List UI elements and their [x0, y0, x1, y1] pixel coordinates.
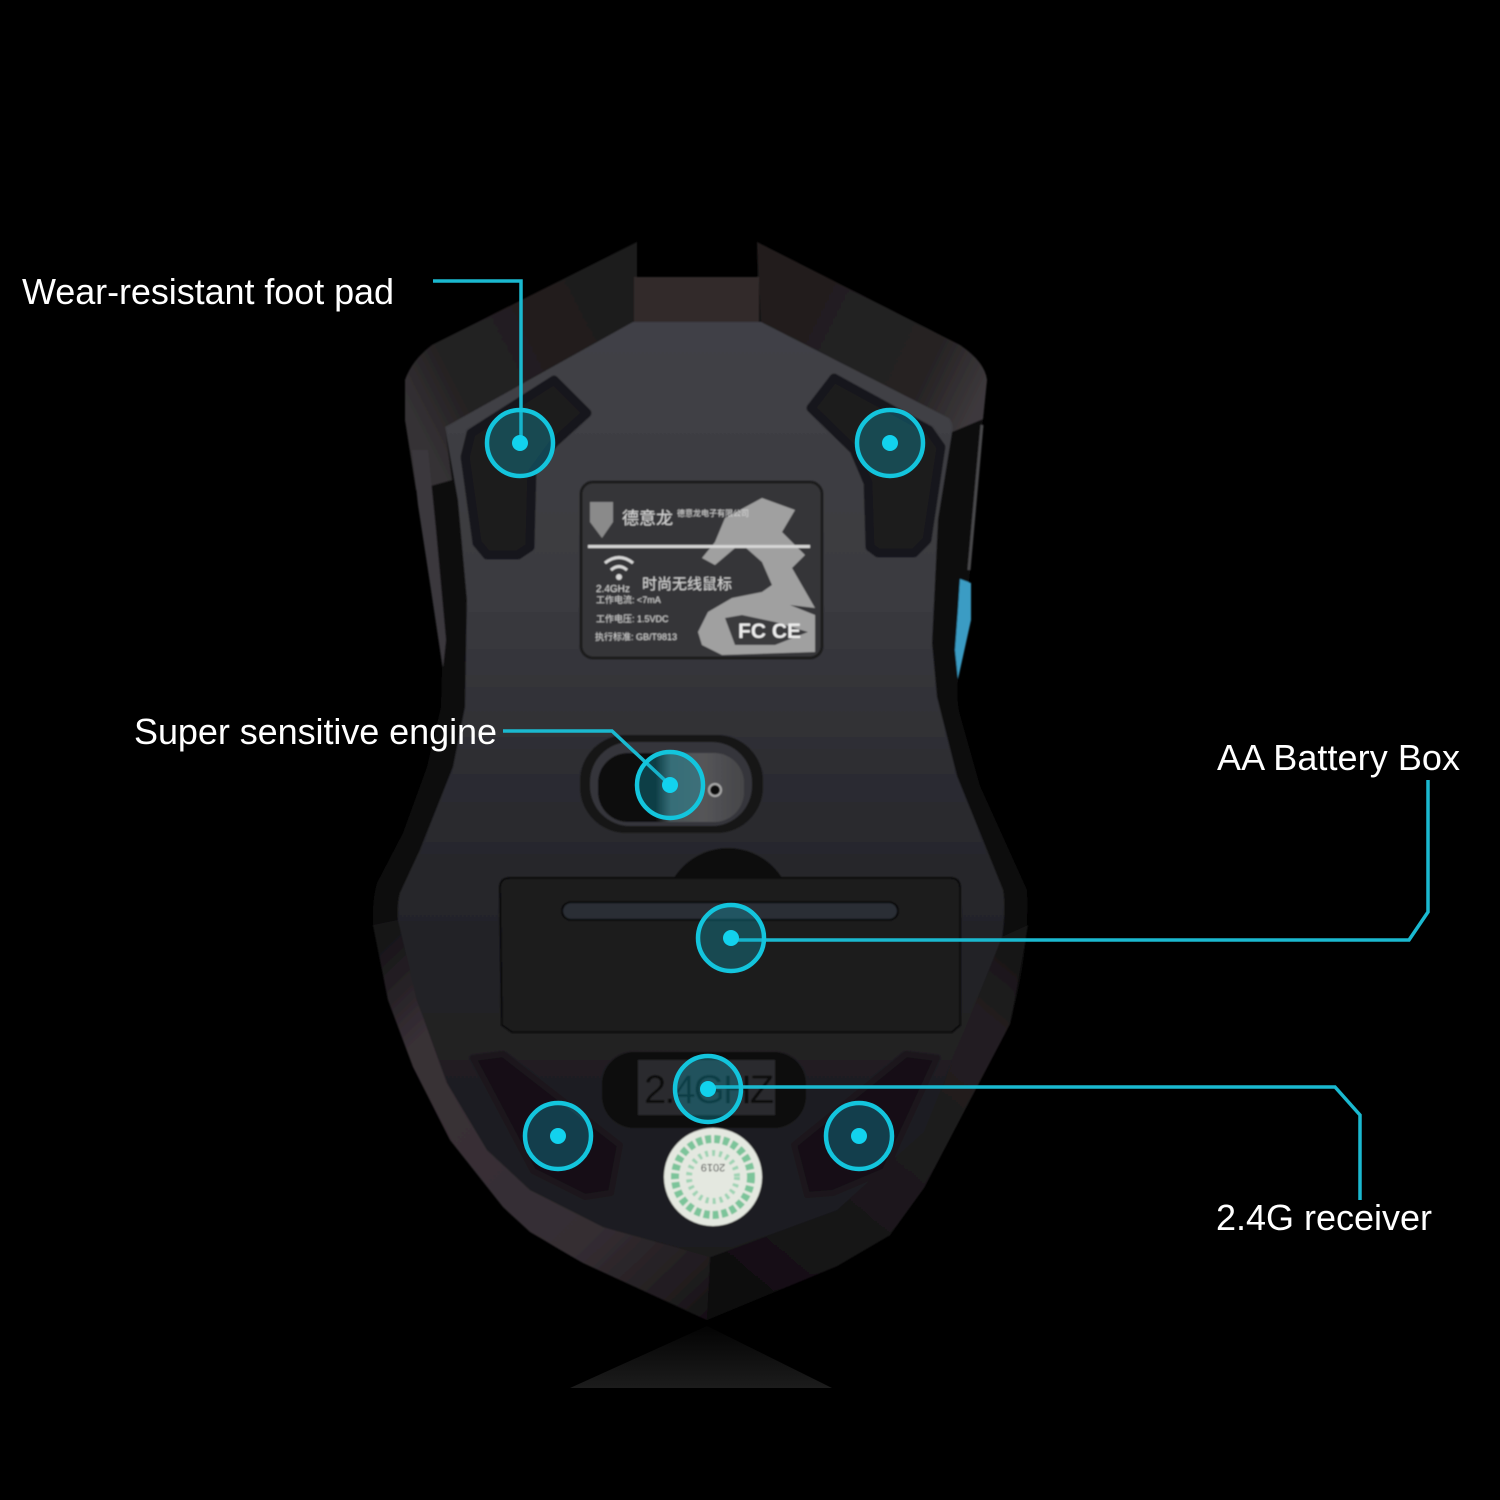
battery door slot	[562, 902, 898, 920]
foot pad bottom right	[794, 1054, 937, 1195]
receiver recess	[602, 1052, 806, 1128]
label divider	[588, 545, 810, 548]
callout: 2.4G receiver	[675, 1056, 1432, 1238]
callout: super sensitive engine	[134, 711, 703, 818]
reflection of mouse	[570, 1326, 832, 1388]
product label: 执行标准: GB/T9813	[595, 631, 677, 642]
wheel recess	[664, 848, 792, 976]
marker: bottom right foot pad	[826, 1103, 892, 1169]
callout: super sensitive engine: Super sensitive engine	[134, 711, 497, 752]
foot pad top left	[465, 380, 587, 555]
callout: wear-resistant foot pad	[22, 271, 553, 476]
label dragon hole	[725, 615, 808, 645]
foot pad bottom left	[473, 1054, 620, 1197]
lower rim right	[707, 925, 1028, 1320]
cable notch	[634, 277, 759, 322]
product label	[581, 482, 822, 658]
label brand text: 德意龙	[622, 509, 673, 528]
mouse illustration	[373, 242, 1028, 1320]
marker: bottom left foot pad	[525, 1103, 591, 1169]
label wifi icon	[605, 558, 633, 578]
product label: 工作电压: 1.5VDC	[596, 613, 669, 624]
foot pad top right	[811, 378, 941, 553]
callout: wear-resistant foot pad: Wear-resistant foot pad	[22, 271, 394, 312]
receiver plate: 2.4GHZ	[644, 1068, 774, 1112]
base plate	[398, 322, 1004, 1257]
label logo shield	[590, 502, 613, 538]
label certification marks: FC CE	[738, 620, 801, 643]
sensor window	[580, 735, 763, 833]
left wing	[405, 242, 637, 490]
mouse outer shell	[373, 242, 1027, 1320]
right side edge highlight	[969, 425, 982, 570]
product label: 工作电流: <7mA	[596, 594, 661, 605]
callout: AA battery box: AA Battery Box	[1217, 737, 1460, 778]
left side grip highlight	[412, 450, 446, 668]
label product text: 2.4GHz	[596, 584, 630, 595]
product label: 时尚无线鼠标	[642, 576, 732, 593]
label dragon	[698, 498, 815, 655]
right wing	[757, 242, 987, 432]
callout: 2.4G receiver: 2.4G receiver	[1216, 1197, 1432, 1238]
label company text: 德意龙电子有限公司	[677, 508, 749, 518]
callout: AA battery box	[698, 737, 1460, 971]
blue side button	[955, 579, 971, 679]
marker: top right foot pad	[857, 410, 923, 476]
battery door	[500, 878, 960, 1032]
lower rim left	[373, 920, 710, 1320]
warranty sticker	[664, 1128, 762, 1226]
warranty sticker: 2019	[701, 1161, 725, 1173]
